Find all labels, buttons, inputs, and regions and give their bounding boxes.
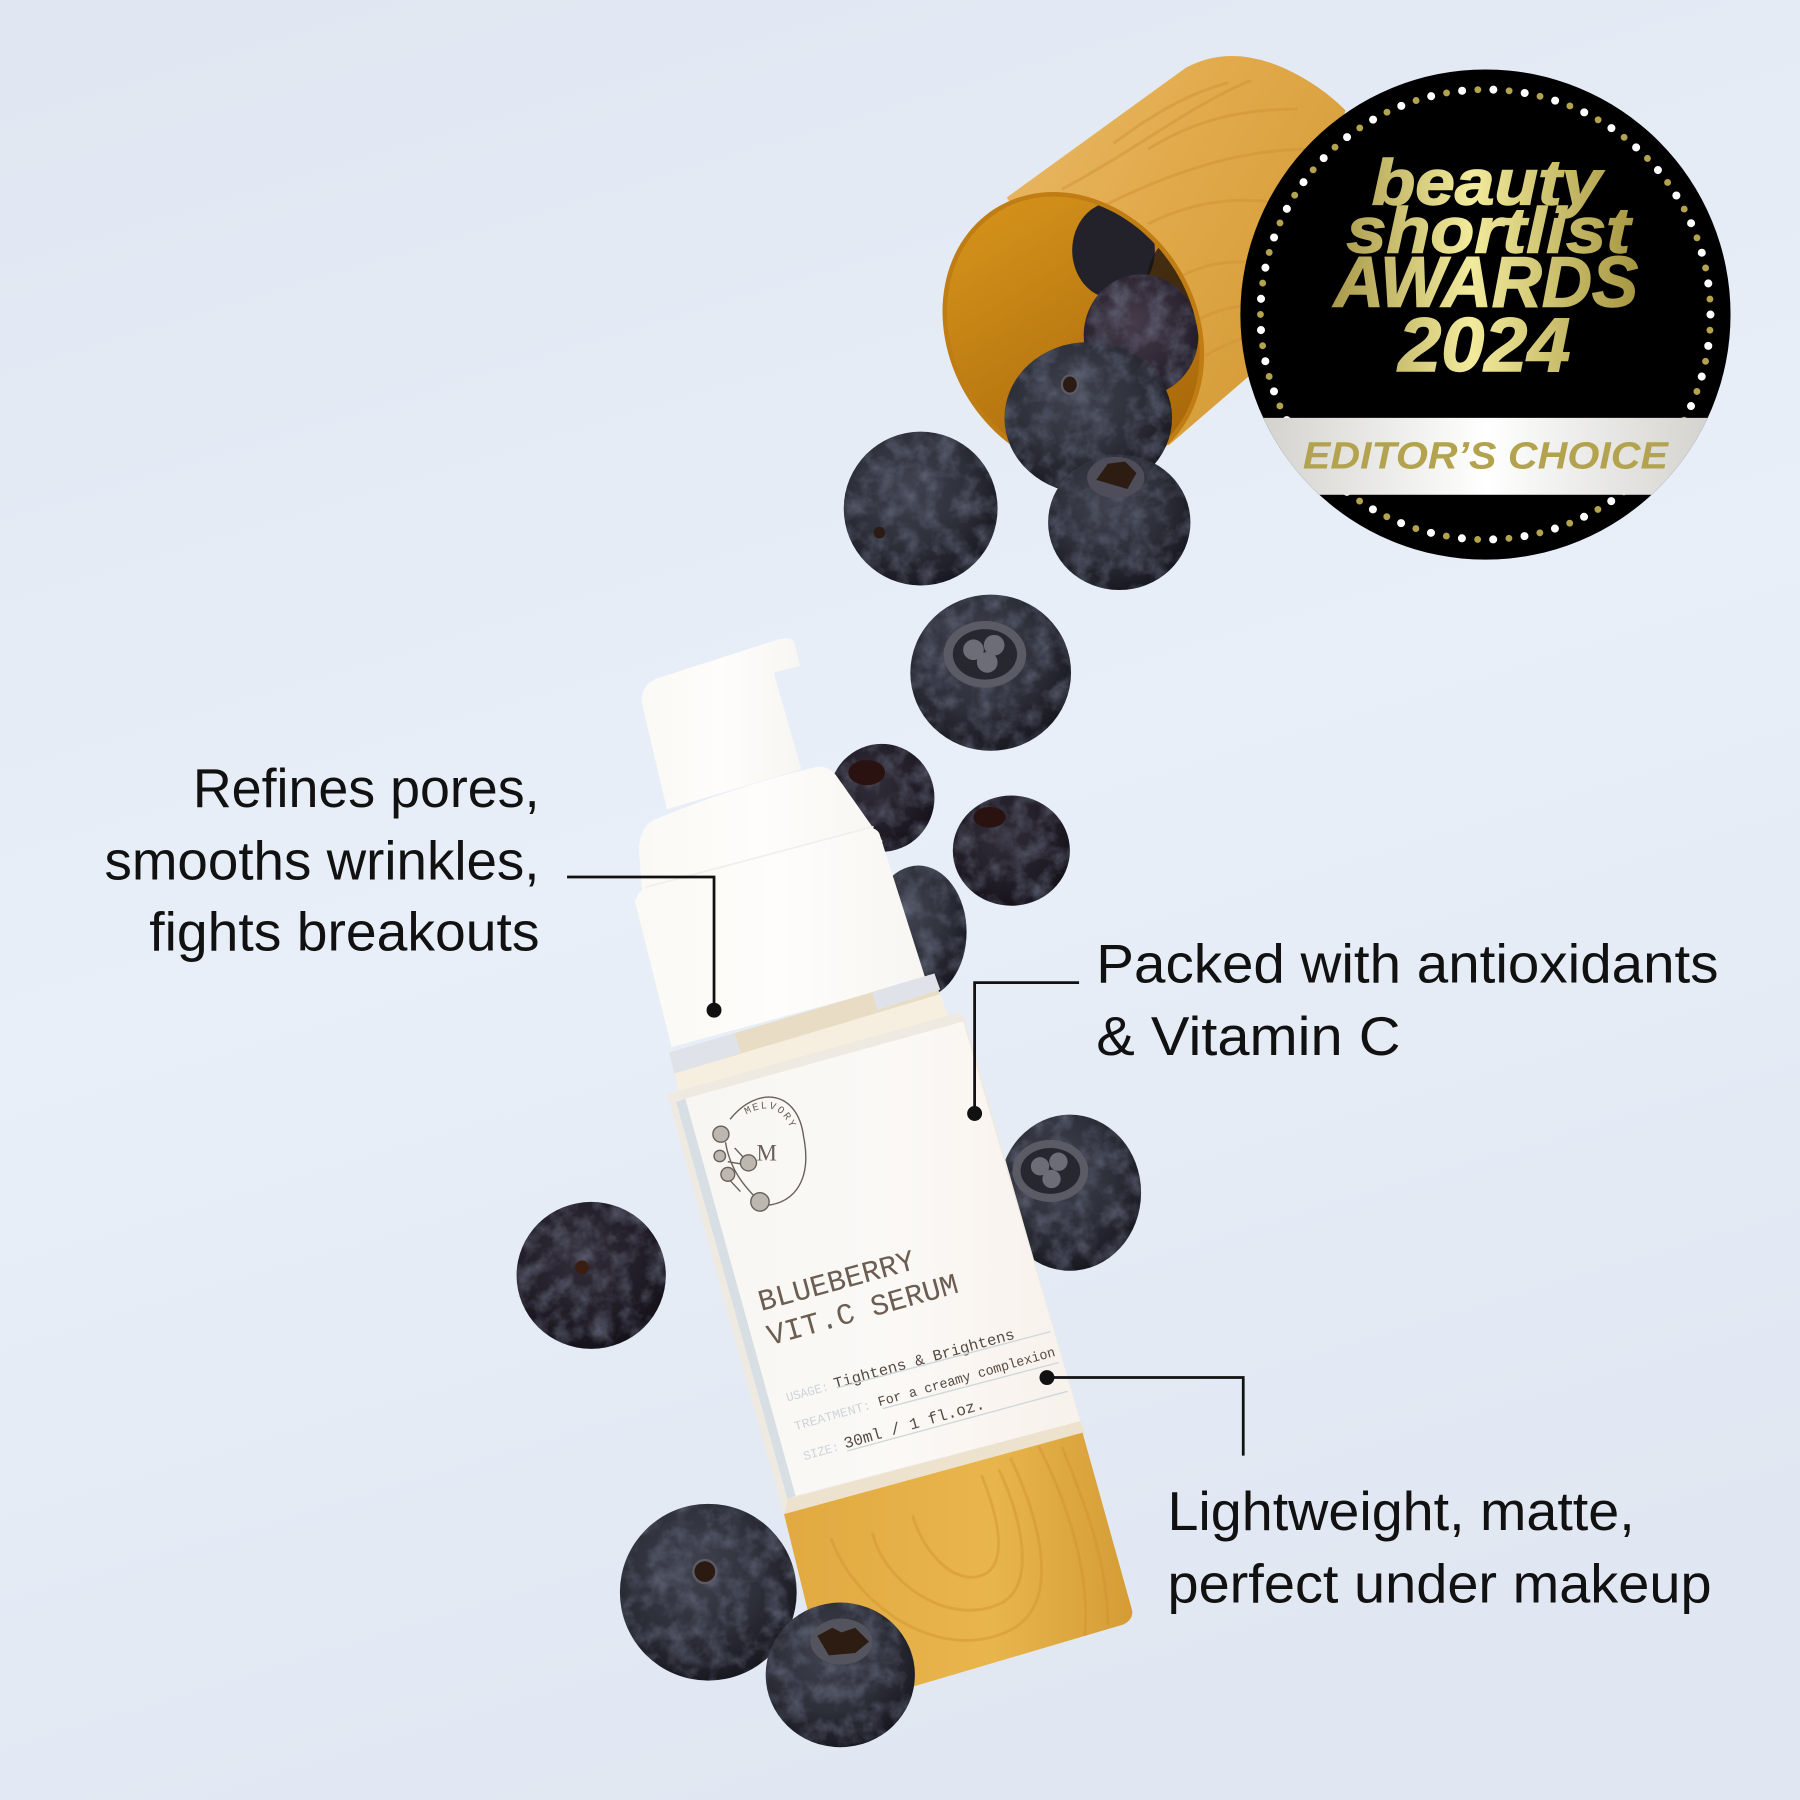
leader line: lightweight [1047, 1378, 1243, 1456]
usage row [784, 1326, 1017, 1406]
berry: behind pump [829, 744, 934, 852]
callout text: pores: smooths wrinkles, [104, 829, 540, 891]
leader dot: lightweight [1039, 1370, 1054, 1385]
badge band label: EDITOR’S CHOICE [1303, 435, 1670, 477]
body tube [667, 1012, 1083, 1515]
callout text: pores [104, 757, 540, 963]
leader line: antioxidants [975, 983, 1079, 1114]
callout: lightweight [1039, 1370, 1712, 1615]
label [685, 1022, 1080, 1496]
logo [713, 1097, 806, 1211]
berry: bottom front [766, 1603, 915, 1747]
cap outer wall [1007, 56, 1345, 445]
berry: behind bottle collar [870, 866, 967, 999]
berry: left top [844, 432, 998, 585]
badge disc [1240, 69, 1731, 560]
badge title: 2024 [1396, 303, 1570, 388]
treatment row: For a creamy complexion [876, 1345, 1057, 1411]
logo leaves [713, 1126, 729, 1142]
berry: behind bottle body [999, 1115, 1141, 1271]
size row: SIZE: [802, 1440, 841, 1464]
award badge [1240, 69, 1733, 560]
berry: right of pump [953, 796, 1070, 906]
berry: center flower calyx [910, 595, 1071, 751]
berry: far left [517, 1202, 666, 1349]
callout: antioxidants [967, 933, 1718, 1121]
badge title: shortlist [1347, 195, 1633, 267]
berry: bottom left [620, 1504, 797, 1681]
badge band [1240, 418, 1733, 495]
size row [801, 1396, 987, 1465]
berry: purple in cap [1084, 274, 1198, 396]
size row: 30ml / 1 fl.oz. [842, 1396, 987, 1453]
cap opening [890, 143, 1256, 523]
berries inside cap [1072, 202, 1198, 396]
callout: pores [104, 757, 721, 1018]
callout text: lightweight: Lightweight, matte, [1167, 1480, 1635, 1542]
frosted band [784, 1421, 1086, 1515]
logo monogram: M [757, 1141, 777, 1166]
berry: right of cap [1048, 455, 1190, 590]
leader line: pores [567, 877, 714, 1010]
logo brand name: MELVORY [744, 1102, 796, 1126]
usage row: USAGE: [785, 1379, 831, 1406]
callout text: pores: fights breakouts [149, 901, 540, 963]
wooden cap [942, 56, 1346, 447]
glass ring [669, 973, 940, 1076]
callout text: antioxidants: & Vitamin C [1096, 1005, 1401, 1067]
callout text: antioxidants [1096, 933, 1718, 1067]
product subtitle: VIT.C SERUM [764, 1268, 962, 1354]
treatment row: TREATMENT: [793, 1398, 873, 1434]
leader dot: pores [707, 1003, 721, 1018]
badge title [1332, 146, 1638, 388]
wood base [784, 1433, 1132, 1710]
bottle [635, 638, 1132, 1686]
usage row: Tightens & Brightens [832, 1326, 1017, 1393]
callout text: antioxidants: Packed with antioxidants [1096, 933, 1718, 995]
callout text: pores: Refines pores, [193, 757, 540, 819]
treatment row [793, 1345, 1057, 1435]
badge title: beauty [1372, 146, 1605, 218]
berry: top large in cap mouth [1004, 342, 1172, 494]
serum cream [675, 994, 948, 1100]
shadow inside cap [1148, 248, 1194, 314]
callout text: lightweight: perfect under makeup [1167, 1553, 1712, 1615]
badge title: AWARDS [1332, 244, 1638, 323]
callout text: lightweight [1167, 1480, 1712, 1615]
leader dot: antioxidants [967, 1106, 982, 1121]
lower cylinder [635, 828, 925, 1047]
pump collar [639, 767, 883, 901]
label edge strip [676, 1099, 796, 1499]
berry: deep in cap [1072, 202, 1155, 298]
pump head [642, 638, 801, 809]
product name: BLUEBERRY [755, 1245, 919, 1320]
